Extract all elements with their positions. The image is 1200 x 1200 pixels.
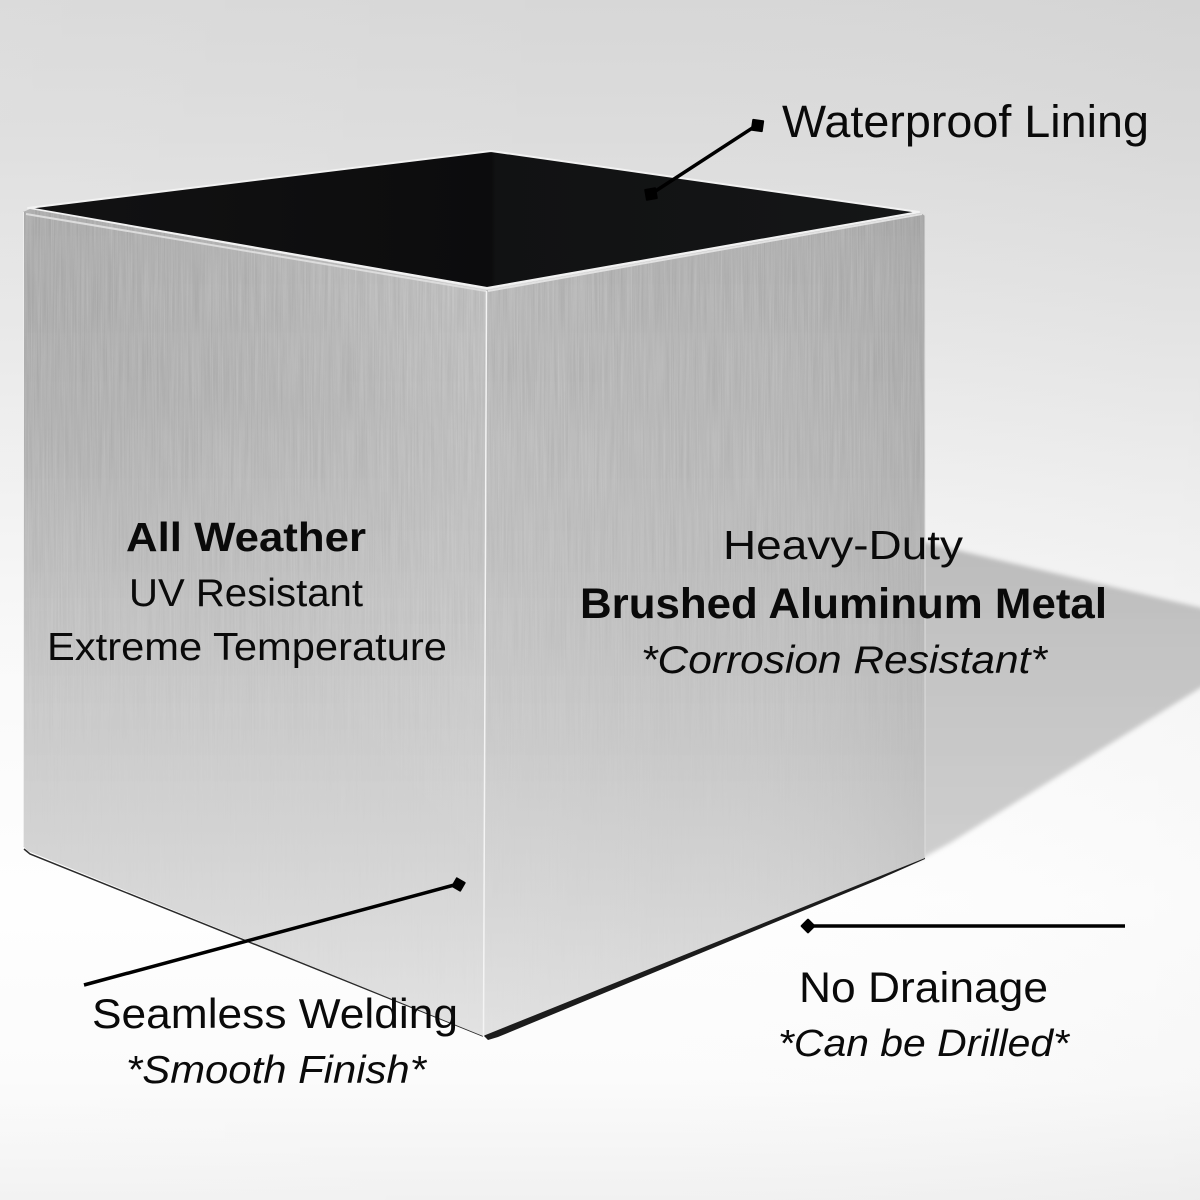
cube right edge highlight	[924, 214, 926, 857]
cube left face	[23, 209, 487, 1036]
text block: brushed aluminum: Brushed Aluminum Metal	[580, 580, 1107, 628]
text block: brushed aluminum	[580, 522, 1107, 682]
text block: all weather: All Weather	[126, 514, 366, 560]
cube right rim	[488, 214, 922, 291]
cube left face glow	[23, 209, 487, 1036]
cube bottom edge	[483, 857, 925, 1040]
cast shadow	[915, 540, 1200, 862]
brushed metal texture	[24, 210, 924, 572]
pointer line	[810, 924, 1125, 928]
cube interior: waterproof lining	[28, 151, 919, 288]
text block: all weather	[47, 514, 447, 669]
callout: no drainage	[778, 918, 1125, 1065]
note: *Smooth Finish*	[126, 1049, 428, 1092]
cube left edge highlight	[22, 212, 24, 846]
callout: waterproof lining	[644, 96, 1149, 201]
cube left bottom edge	[24, 849, 483, 1036]
text block: brushed aluminum: *Corrosion Resistant*	[641, 639, 1049, 682]
pointer line	[84, 884, 458, 985]
pointer end marker	[451, 877, 466, 892]
label: Seamless Welding	[92, 990, 458, 1037]
text block: brushed aluminum: Heavy-Duty	[723, 522, 964, 568]
planter cube	[23, 150, 926, 1040]
cube corner highlight	[484, 291, 486, 1036]
pointer end markers	[644, 187, 658, 201]
label: No Drainage	[799, 964, 1048, 1012]
pointer end marker	[800, 918, 816, 934]
label: Waterproof Lining	[782, 96, 1149, 147]
cube right face shade	[483, 213, 925, 1036]
note: *Can be Drilled*	[778, 1023, 1070, 1065]
pointer line	[651, 125, 757, 194]
text block: all weather: UV Resistant	[129, 572, 363, 615]
callout: seamless welding	[84, 877, 466, 1092]
cube right face	[483, 213, 925, 1036]
text block: all weather: Extreme Temperature	[47, 626, 447, 669]
cube left rim	[26, 214, 486, 291]
